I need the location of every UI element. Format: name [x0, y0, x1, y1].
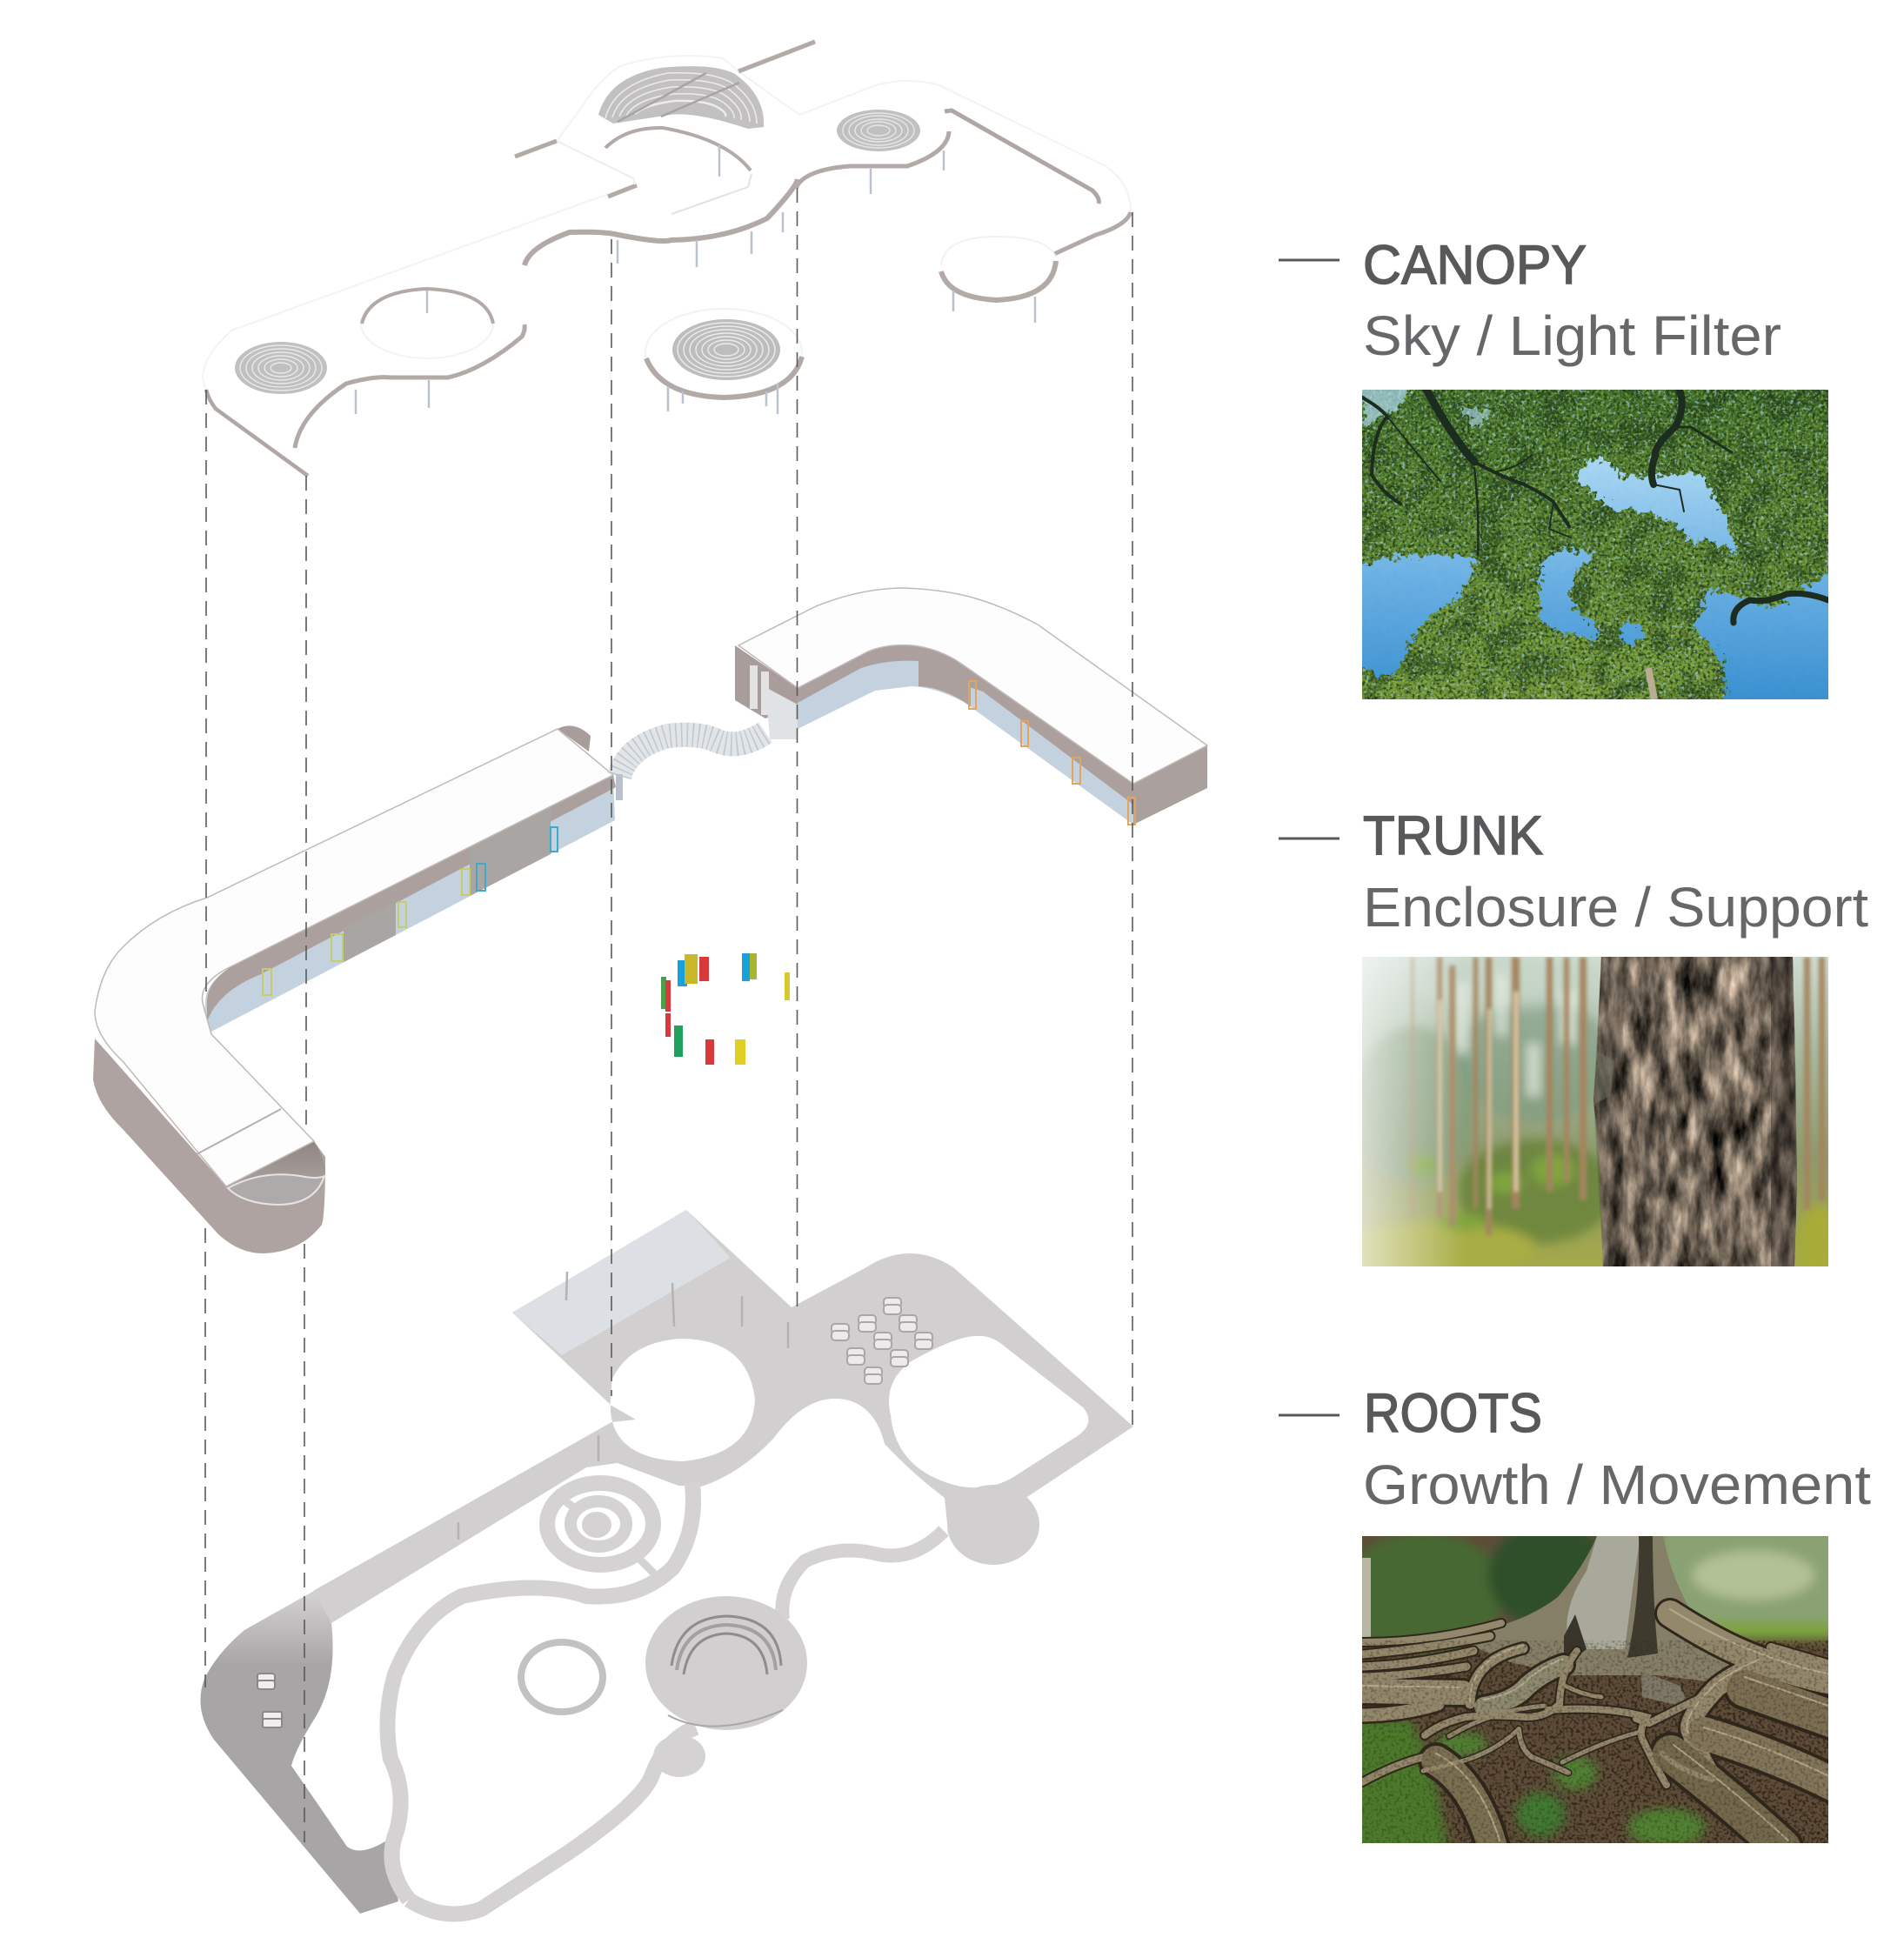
spiral skylight: east [837, 110, 920, 151]
photo: tree roots [1362, 1536, 1828, 1843]
roof lower edge shading [295, 324, 524, 448]
roof faint outline [203, 56, 1131, 390]
translucent terrace [512, 1210, 731, 1355]
east door frames [969, 681, 1135, 825]
leader line [1279, 1414, 1339, 1416]
round opening centre [605, 128, 751, 170]
heading: ROOTS [1364, 1383, 1542, 1444]
stone [1640, 1671, 1691, 1708]
heading: CANOPY [1363, 235, 1587, 296]
subheading: Enclosure / Support [1363, 876, 1868, 939]
spiral skylight: centre disc [672, 319, 780, 380]
coloured panels ring [661, 953, 790, 1065]
glazed inner wall [205, 775, 615, 1032]
photo: pine trunk [1362, 957, 1828, 1266]
end cap [558, 725, 591, 752]
photo: tree canopy [1362, 390, 1828, 699]
open cylinder pocket [226, 1141, 325, 1205]
end face [1133, 745, 1207, 825]
small round plaza [653, 1735, 705, 1777]
heading: TRUNK [1363, 805, 1543, 866]
spiral dome: top [598, 66, 764, 129]
grey wall segments [344, 901, 396, 962]
spiral skylight: west [235, 342, 327, 394]
stair tower [735, 645, 798, 739]
canopy roof [203, 42, 1131, 476]
label: canopy [1279, 235, 1781, 367]
trunk: left volume [93, 725, 616, 1253]
roof slab [95, 729, 613, 1186]
corner benches [257, 1674, 282, 1727]
round sunken plaza [645, 1596, 807, 1730]
main roots slab [313, 1210, 1133, 1623]
west door frames [263, 869, 470, 995]
label: roots [1279, 1383, 1871, 1516]
solid wall segment [919, 648, 971, 706]
roof central edge shading [524, 179, 798, 265]
wall band [798, 645, 1133, 805]
label: trunk [1279, 805, 1868, 939]
leader line [1279, 837, 1339, 840]
trunk: right volume [735, 588, 1207, 825]
slab joint [197, 1109, 281, 1154]
road: south loop [409, 1727, 696, 1914]
concrete band [207, 775, 616, 1022]
outer curved wall [93, 1039, 325, 1253]
dark corner plate [200, 1591, 398, 1914]
roof south-east edge [1054, 212, 1131, 254]
glazed inner wall [798, 645, 1133, 825]
roof east edge shading [796, 131, 949, 188]
roof north-east edge [945, 110, 1099, 204]
round pavilion disc [941, 237, 1056, 300]
stair ribbon [616, 732, 765, 800]
spiral ramp [547, 1483, 659, 1579]
road: west loop [387, 1483, 693, 1900]
roof slab [738, 588, 1207, 784]
roots floor plate [200, 1210, 1133, 1914]
benches cluster [832, 1298, 932, 1384]
ring seating [521, 1642, 603, 1712]
grey wall segment east [470, 805, 551, 896]
canopy faint notch lines [557, 141, 635, 184]
round opening west [361, 289, 493, 358]
dashed projection lines [205, 188, 1132, 1842]
pocket floor [228, 1174, 324, 1205]
east loop bump [947, 1485, 1039, 1565]
roof west edge [206, 390, 308, 476]
canopy columns [356, 145, 1035, 414]
round skylight arc [671, 174, 752, 214]
subheading: Sky / Light Filter [1363, 304, 1781, 367]
road: east link [782, 1531, 944, 1620]
leader line [1279, 259, 1339, 261]
notch short edges [515, 42, 815, 197]
floor pins [458, 1272, 788, 1540]
west blue door frames [477, 827, 558, 891]
free disc roof [645, 309, 802, 398]
subheading: Growth / Movement [1363, 1453, 1871, 1516]
